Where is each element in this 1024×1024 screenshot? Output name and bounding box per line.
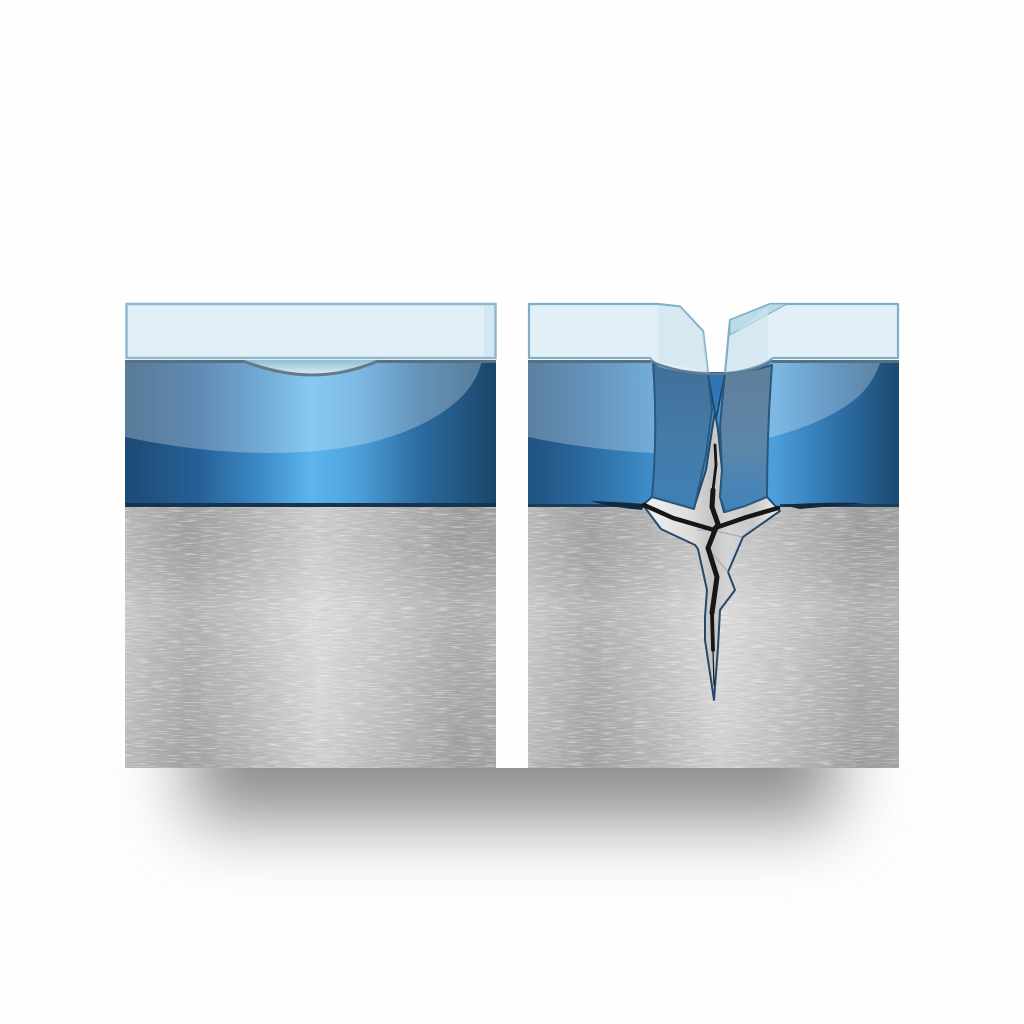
white notch between glass pieces (700, 300, 735, 372)
black crack lines (644, 445, 778, 685)
right coating band (720, 365, 772, 512)
panel: cracked coating (528, 300, 899, 768)
cracked glass right piece (658, 304, 898, 373)
metal substrate (left) (125, 507, 496, 768)
dent in coating surface (243, 360, 378, 375)
silver crack opening (643, 412, 780, 700)
panel: intact coating (125, 304, 496, 768)
blue layer (right) (528, 360, 899, 510)
left coating band (652, 364, 712, 509)
metal substrate (right) (528, 507, 899, 768)
glass top layer (left) (126, 304, 496, 358)
drop shadow under panels (141, 768, 884, 869)
blue layer (left) (125, 360, 496, 507)
cracked glass left piece (529, 304, 708, 373)
glass bottom seam (650, 361, 772, 374)
exposed wedge between bands (708, 373, 725, 420)
